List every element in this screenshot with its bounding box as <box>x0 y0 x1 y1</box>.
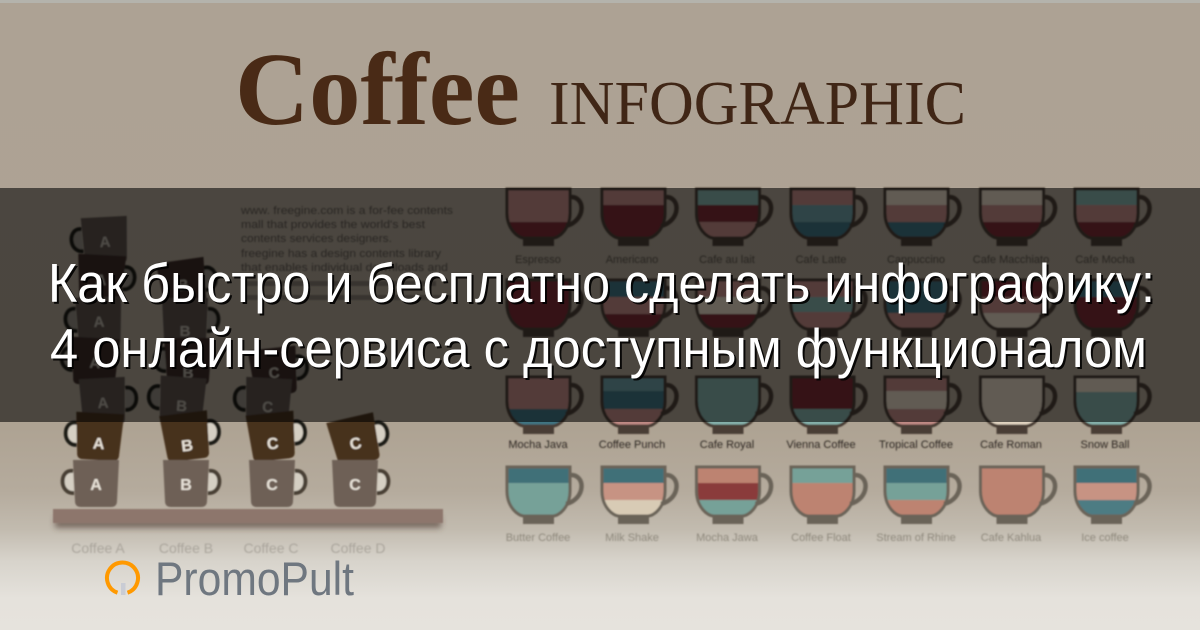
panel: stacked cups <box>53 216 443 556</box>
row 1 labels <box>515 254 1136 266</box>
text block: description <box>240 205 456 300</box>
title: Coffee Infographic <box>235 32 966 147</box>
shelf <box>53 509 443 528</box>
row 3 labels: Cafe Royal <box>700 439 754 451</box>
text block: description: that enables individual downloads and <box>241 262 448 274</box>
cup: Stream of Rhine <box>885 467 960 524</box>
row 1 labels: Cappuccino <box>887 254 945 266</box>
stack B: B <box>176 398 188 415</box>
shelf labels: Coffee B <box>159 540 213 556</box>
cup: Cafe au lait <box>696 189 771 246</box>
cup: Cafe Kahlua <box>980 467 1055 524</box>
stack D: C <box>349 477 361 494</box>
stack A: A <box>97 395 109 412</box>
text block: description: mall that provides the world's best <box>241 219 425 231</box>
row 4 labels <box>506 532 1129 544</box>
stack B <box>147 256 222 507</box>
panel: coffee cups chart <box>506 189 1150 544</box>
cup: Cafe Latte <box>791 189 866 246</box>
stack C: C <box>262 399 274 416</box>
cup: Americano <box>602 189 677 246</box>
cup: Mocha Jawa <box>696 467 771 524</box>
dark overlay band <box>0 188 1200 422</box>
row 3 labels <box>508 439 1129 451</box>
row 4 labels: Ice coffee <box>1081 532 1129 544</box>
cup: Cafe Macchiato <box>980 189 1055 246</box>
row 4 labels: Milk Shake <box>605 532 659 544</box>
cup: Butter Coffee <box>507 467 582 524</box>
row 2 cups <box>507 280 1150 337</box>
stack A: A <box>89 355 101 372</box>
logo: PromoPult <box>107 552 354 605</box>
cup: Vienna Coffee <box>791 377 866 434</box>
stack A: A <box>90 477 102 494</box>
row 4 labels: Mocha Jawa <box>696 532 759 544</box>
cup: Snow Ball <box>1075 377 1150 434</box>
row 3 labels: Snow Ball <box>1081 439 1129 451</box>
row 1 labels: Cafe Mocha <box>1075 254 1136 266</box>
row 3 labels: Mocha Java <box>508 439 569 451</box>
cup: Cafe Mocha <box>1075 189 1150 246</box>
stack C: C <box>266 477 278 494</box>
row 4 labels: Coffee Float <box>791 532 851 544</box>
cup: Ice coffee <box>1075 467 1150 524</box>
title: Coffee Infographic: Coffee <box>235 32 520 147</box>
cup: Coffee Float <box>791 467 866 524</box>
row 3 labels: Vienna Coffee <box>786 439 856 451</box>
stack A: A <box>92 436 105 453</box>
row 4 cups <box>507 467 1150 524</box>
title: Coffee Infographic: INFOGRAPHIC <box>549 70 966 138</box>
cup: Milk Shake <box>602 467 677 524</box>
stack C <box>233 345 310 507</box>
row 3 labels: Cafe Roman <box>980 439 1042 451</box>
row 4 labels: Stream of Rhine <box>876 532 956 544</box>
stack A: A <box>99 234 111 251</box>
stack B: B <box>180 323 191 340</box>
stack B: B <box>180 477 192 494</box>
row 1 labels: Cafe au lait <box>699 254 755 266</box>
row 3 cups <box>507 377 1150 434</box>
shelf labels <box>71 540 386 556</box>
cup: Coffee Punch <box>602 377 677 434</box>
shelf labels: Coffee D <box>330 540 386 556</box>
stack A <box>60 216 138 507</box>
row 1 cups <box>507 189 1150 246</box>
cup: Cafe Royal <box>696 377 771 434</box>
shelf labels: Coffee C <box>244 540 298 556</box>
row 1 labels: Cafe Macchiato <box>973 254 1049 266</box>
cup: Espresso <box>507 189 582 246</box>
stack B: B <box>183 365 194 382</box>
cup: Cappuccino <box>885 189 960 246</box>
row 3 labels: Coffee Punch <box>599 439 665 451</box>
stack A: A <box>93 314 105 331</box>
row 4 labels: Butter Coffee <box>506 532 570 544</box>
stack D <box>326 410 393 507</box>
cup: Tropical Coffee <box>885 377 960 434</box>
row 4 labels: Cafe Kahlua <box>981 532 1042 544</box>
headline <box>48 252 1155 379</box>
cup: Mocha Java <box>507 377 582 434</box>
icon: power ring <box>107 563 138 595</box>
stack A: A <box>95 272 107 289</box>
row 1 labels: Cafe Latte <box>796 254 846 266</box>
text block: description: freegine has a design contents library <box>241 248 442 260</box>
row 1 labels: Espresso <box>515 254 561 266</box>
stack B: B <box>177 276 190 295</box>
stack B: B <box>180 437 194 456</box>
row 3 labels: Tropical Coffee <box>879 439 953 451</box>
cup: Cafe Roman <box>980 377 1055 434</box>
stack D: C <box>348 435 364 454</box>
text block: description: contents services designers. <box>241 233 392 245</box>
row 1 labels: Americano <box>606 254 658 266</box>
text block: description: www. freegine.com is a for-fee contents <box>240 205 454 217</box>
wordmark: PromoPult <box>155 552 354 605</box>
stack C: C <box>266 435 280 454</box>
stack C: C <box>268 364 281 383</box>
shelf labels: Coffee A <box>71 540 125 556</box>
